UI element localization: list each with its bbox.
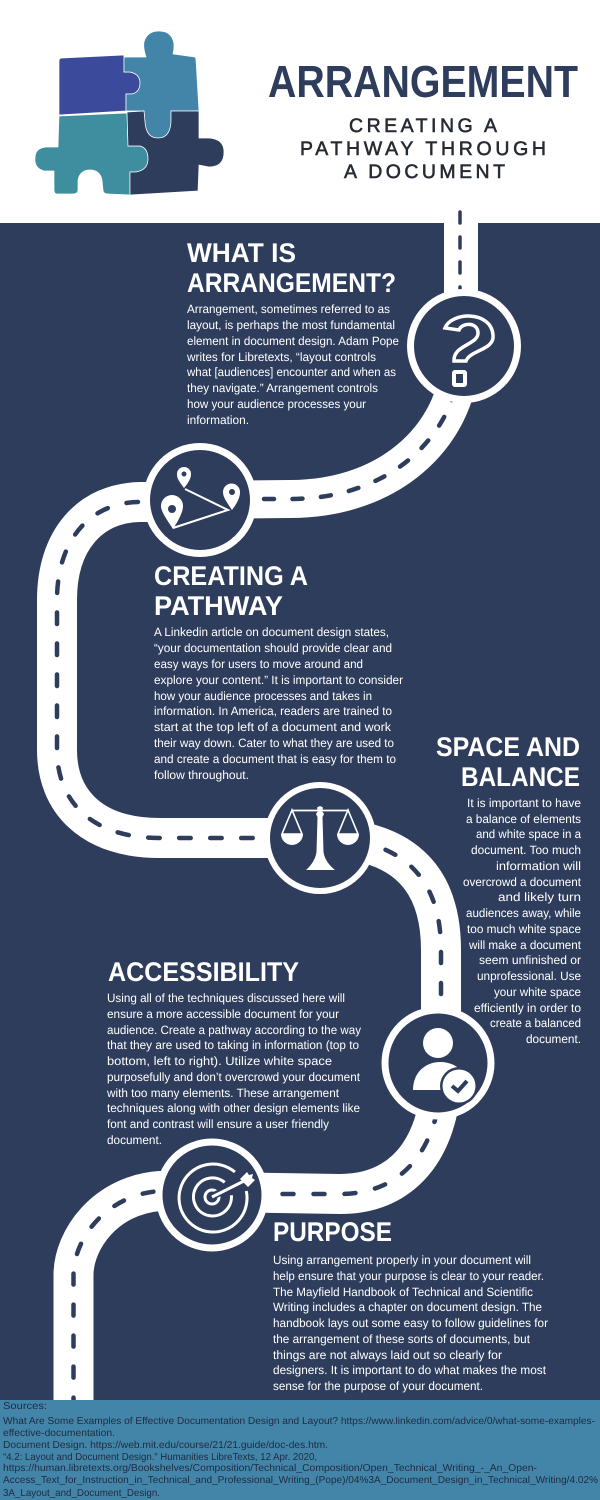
text block: accessibility: purposefully and don’t overcrowd your document <box>107 1070 361 1084</box>
text block: creating a pathway: information. In America, readers are trained to <box>154 704 392 718</box>
heading: purpose: PURPOSE <box>273 1217 392 1247</box>
text block: what is arrangement: they navigate.” Arrangement controls <box>187 381 378 395</box>
text block: creating a pathway: and create a document that is easy for them to <box>154 752 396 766</box>
heading: what is arrangement: ARRANGEMENT? <box>187 268 396 298</box>
heading: space and balance: SPACE AND <box>436 732 580 762</box>
text block: what is arrangement <box>186 302 399 427</box>
text block: creating a pathway: A Linkedin article on document design states, <box>154 625 389 639</box>
text block: purpose: things are not always laid out so clearly for <box>273 1348 502 1362</box>
text block: purpose: help ensure that your purpose is clear to your reader. <box>273 1269 544 1283</box>
text block: space and balance: efficiently in order to <box>474 1001 581 1015</box>
subtitle: CREATING A <box>349 115 497 137</box>
icon: user with check circle <box>385 1010 491 1116</box>
text block: accessibility: bottom, left to right). Utilize white space <box>107 1054 332 1068</box>
text block: what is arrangement: writes for Libretexts, “layout controls <box>186 350 376 364</box>
text block: accessibility: techniques along with other design elements like <box>107 1101 360 1115</box>
subtitle: A DOCUMENT <box>344 161 505 183</box>
heading: creating a pathway: PATHWAY <box>154 591 283 621</box>
text block: accessibility: with too many elements. These arrangement <box>106 1086 340 1100</box>
text block: accessibility <box>106 991 361 1147</box>
icon: question mark circle <box>410 292 518 400</box>
heading: space and balance <box>436 732 580 792</box>
panel: sources <box>0 1400 600 1500</box>
text block: creating a pathway: start at the top left of a document and work <box>154 720 392 734</box>
text block: space and balance: too much white space <box>467 922 581 936</box>
heading: space and balance: BALANCE <box>461 762 580 792</box>
main navy panel <box>0 223 600 1400</box>
text block: space and balance: overcrowd a document <box>463 875 582 889</box>
text block: accessibility: Using all of the techniques discussed here will <box>107 991 345 1005</box>
icon: map pins circle <box>146 446 254 554</box>
text block: purpose <box>273 1253 548 1393</box>
text block: purpose: the arrangement of these sorts of documents, but <box>273 1332 531 1346</box>
sources heading: Sources: <box>3 1401 47 1412</box>
text block: space and balance: It is important to have <box>467 796 581 810</box>
text block: accessibility: document. <box>107 1133 162 1147</box>
text block: creating a pathway: explore your content.” It is important to consider <box>154 673 403 687</box>
text block: space and balance: and likely turn <box>498 890 581 904</box>
text block: space and balance: create a balanced <box>490 1016 581 1030</box>
heading: creating a pathway: CREATING A <box>154 561 308 591</box>
text block: what is arrangement: information. <box>187 413 249 427</box>
text block: creating a pathway: how your audience processes and takes in <box>154 689 372 703</box>
sources list: What Are Some Examples of Effective Documentation Design and Layout? https://www.linkedin.com/advice/0/what-some-examples- <box>3 1416 595 1427</box>
text block: space and balance: audiences away, while <box>466 906 581 920</box>
heading: creating a pathway <box>154 561 308 621</box>
sources list: “4.2: Layout and Document Design.” Humanities LibreTexts, 12 Apr. 2020, <box>3 1452 317 1463</box>
text block: what is arrangement: Arrangement, sometimes referred to as <box>187 302 390 316</box>
subtitle <box>300 115 546 183</box>
text block: space and balance: a balance of elements <box>466 812 581 826</box>
heading: what is arrangement <box>187 238 396 298</box>
sources list <box>3 1416 598 1499</box>
text block: accessibility: audience. Create a pathway according to the way <box>107 1023 361 1037</box>
icon: target with arrow circle <box>159 1142 265 1248</box>
text block: creating a pathway: their way down. Cater to what they are used to <box>154 736 394 750</box>
sources list: Document Design. https://web.mit.edu/course/21/21.guide/doc-des.htm. <box>3 1440 328 1451</box>
road: winding pathway <box>57 212 461 1400</box>
text block: what is arrangement: element in document design. Adam Pope <box>187 334 399 348</box>
text block: purpose: Using arrangement properly in your document will <box>273 1253 531 1267</box>
text block: space and balance: unprofessional. Use <box>477 969 581 983</box>
text block: what is arrangement: what [audiences] encounter and when as <box>186 365 396 379</box>
subtitle: PATHWAY THROUGH <box>300 138 546 160</box>
text block: space and balance: information will <box>496 859 581 873</box>
heading: accessibility: ACCESSIBILITY <box>108 957 299 987</box>
text block: creating a pathway: easy ways for users to move around and <box>154 657 363 671</box>
text block: purpose: sense for the purpose of your document. <box>273 1379 483 1393</box>
text block: space and balance: your white space <box>494 985 581 999</box>
icon: balance scale circle <box>267 785 373 891</box>
text block: accessibility: font and contrast will ensure a user friendly <box>107 1117 329 1131</box>
text block: space and balance: will make a document <box>468 938 582 952</box>
text block: purpose: The Mayfield Handbook of Technical and Scientific <box>273 1285 533 1299</box>
sources list: 3A_Layout_and_Document_Design. <box>3 1488 160 1499</box>
text block: creating a pathway: follow throughout. <box>154 768 249 782</box>
text block: purpose: designers. It is important to do what makes the most <box>273 1363 547 1377</box>
sources list: Access_Text_for_Instruction_in_Technical_and_Professional_Writing_(Pope)/04%3A_Document_Design_in_Technical_Writing/4.02% <box>3 1475 598 1486</box>
icon: puzzle pieces <box>35 31 224 195</box>
sources list: https://human.libretexts.org/Bookshelves/Composition/Technical_Composition/Open_Technical_Writing_-_An_Open- <box>3 1463 537 1474</box>
text block: purpose: Writing includes a chapter on document design. The <box>273 1300 542 1314</box>
text block: accessibility: ensure a more accessible document for your <box>107 1007 339 1021</box>
text block: accessibility: that they are used to taking in information (top to <box>107 1038 359 1052</box>
text block: what is arrangement: layout, is perhaps the most fundamental <box>187 318 395 332</box>
text block: purpose: handbook lays out some easy to follow guidelines for <box>273 1316 548 1330</box>
text block: space and balance: and white space in a <box>476 827 581 841</box>
text block: creating a pathway: “your documentation should provide clear and <box>154 641 392 655</box>
sources list: effective-documentation. <box>3 1428 115 1439</box>
header background <box>0 0 600 223</box>
text block: space and balance: seem unfinished or <box>479 953 581 967</box>
text block: space and balance: document. <box>526 1032 581 1046</box>
text block: space and balance: document. Too much <box>471 843 581 857</box>
text block: space and balance <box>463 796 582 1046</box>
text block: creating a pathway <box>154 625 403 782</box>
text block: what is arrangement: how your audience processes your <box>187 397 366 411</box>
heading: what is arrangement: WHAT IS <box>187 238 296 268</box>
